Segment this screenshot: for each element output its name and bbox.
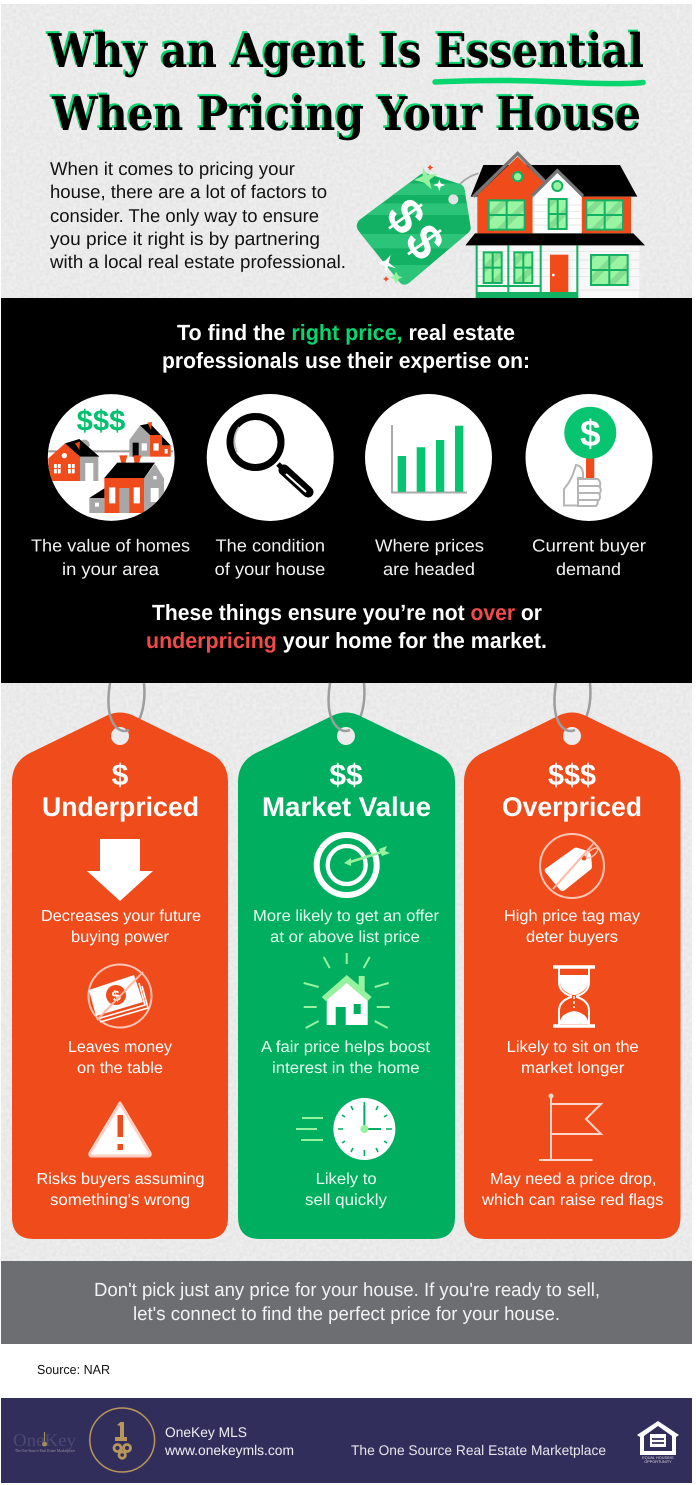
- intro text: [49, 158, 346, 272]
- section conclusion: [146, 600, 547, 653]
- tag statements: sell quickly: [305, 1192, 387, 1209]
- tag statements: interest in the home: [272, 1060, 420, 1077]
- intro text: house, there are a lot of factors to: [50, 181, 327, 202]
- icon: rising bar chart: [365, 394, 492, 521]
- icon: equal housing opportunity: [637, 1421, 679, 1464]
- icon: thumbs up with dollar sign: $: [580, 413, 601, 454]
- factor labels: are headed: [383, 559, 475, 579]
- panel: black expertise section: [1, 298, 692, 683]
- factor labels: The value of homes: [31, 536, 190, 556]
- panel: tags background: [1, 683, 692, 1261]
- tag statements: Likely to: [316, 1171, 377, 1188]
- factor labels: [31, 536, 646, 579]
- tag statements: [36, 908, 204, 1209]
- factor labels: of your house: [215, 559, 325, 579]
- icon: house with light rays: [304, 953, 390, 1028]
- tag statements: market longer: [521, 1060, 625, 1077]
- factor labels: The condition: [216, 536, 325, 556]
- icon: value of homes: [47, 394, 175, 521]
- tag statements: Decreases your future: [41, 908, 201, 925]
- section heading: [162, 320, 530, 373]
- icon: equal housing opportunity: OPPORTUNITY: [644, 1460, 672, 1464]
- icon: green price tag: [350, 165, 483, 287]
- icon: green price tag: $: [394, 214, 456, 269]
- tag statements: High price tag may: [504, 908, 640, 925]
- tag heading: [262, 759, 431, 822]
- tag statements: Likely to sit on the: [507, 1039, 639, 1056]
- icon: clock with speed lines: [296, 1098, 395, 1160]
- tag heading: [42, 759, 199, 822]
- contact text: www.onekeymls.com: [164, 1442, 294, 1458]
- panel: call to action: Don't pick just any price for your house. If you're ready to sell,: [94, 1280, 600, 1301]
- icon: red flag: [539, 1094, 601, 1160]
- source note: Source: NAR: [37, 1362, 110, 1377]
- panel: market value tag: [238, 683, 455, 1239]
- icon: price tag crossed out: [540, 834, 604, 898]
- panel: overpriced tag: [464, 683, 680, 1239]
- tag statements: [481, 908, 664, 1209]
- tag statements: on the table: [77, 1060, 163, 1077]
- tag statements: Leaves money: [68, 1039, 172, 1056]
- faint logo: The One Source Real Estate Marketplace: [15, 1448, 75, 1453]
- section conclusion: underpricing your home for the market.: [146, 628, 547, 653]
- contact text: [164, 1424, 294, 1458]
- intro text: When it comes to pricing your: [50, 158, 295, 179]
- intro text: consider. The only way to ensure: [50, 205, 319, 226]
- section heading: To find the right price, real estate: [177, 320, 515, 345]
- icon: equal housing opportunity: EQUAL HOUSING: [642, 1456, 674, 1460]
- icon: hourglass: [553, 967, 595, 1026]
- panel: call to action: let's connect to find the perfect price for your house.: [133, 1304, 560, 1325]
- icon: magnifying glass: [207, 394, 334, 521]
- tag heading: Underpriced: [42, 792, 199, 822]
- tag statements: buying power: [71, 929, 170, 946]
- contact text: OneKey MLS: [165, 1424, 247, 1440]
- tag heading: Market Value: [262, 792, 431, 822]
- factor labels: in your area: [62, 559, 159, 579]
- section heading: professionals use their expertise on:: [162, 348, 530, 373]
- tag heading: $$: [329, 759, 363, 792]
- tag statements: Risks buyers assuming: [36, 1171, 204, 1188]
- tagline: The One Source Real Estate Marketplace: [351, 1442, 606, 1458]
- icon: thumbs up with dollar sign: [526, 394, 652, 521]
- tag statements: A fair price helps boost: [261, 1039, 431, 1056]
- faint logo: OneKey: [13, 1430, 76, 1450]
- panel: footer: [1, 1398, 692, 1483]
- tag statements: at or above list price: [270, 929, 420, 946]
- icon: target with arrow: [317, 835, 390, 895]
- tag statements: something's wrong: [50, 1192, 190, 1209]
- icon: warning triangle: [90, 1103, 150, 1156]
- factor labels: demand: [556, 559, 621, 579]
- tag heading: Overpriced: [502, 792, 642, 822]
- title: [47, 23, 644, 141]
- tag statements: More likely to get an offer: [253, 908, 440, 925]
- panel: header background: [1, 4, 692, 298]
- tag statements: May need a price drop,: [490, 1171, 656, 1188]
- panel: call to action: [1, 1261, 692, 1344]
- section conclusion: These things ensure you’re not over or: [152, 600, 542, 625]
- tag heading: [502, 759, 642, 822]
- tag heading: $: [112, 759, 129, 792]
- factor labels: Where prices: [375, 536, 484, 556]
- intro text: you price it right is by partnering: [50, 228, 320, 249]
- tag statements: deter buyers: [526, 929, 618, 946]
- tag statements: which can raise red flags: [481, 1192, 664, 1209]
- panel: underpriced tag: [12, 683, 228, 1239]
- icon: gold key logo: [90, 1408, 155, 1472]
- icon: money crossed out: [88, 964, 152, 1028]
- icon: house: [465, 153, 645, 299]
- title underline: [435, 80, 643, 84]
- icon: green price tag: $: [375, 188, 437, 244]
- factor labels: Current buyer: [532, 536, 646, 556]
- icon: down arrow: [87, 839, 153, 901]
- icon: value of homes: $$$: [77, 404, 125, 437]
- icon: money crossed out: $: [110, 987, 123, 1006]
- icon: price tag and house: [350, 153, 645, 299]
- tag heading: $$$: [548, 759, 596, 792]
- intro text: with a local real estate professional.: [49, 251, 346, 272]
- tag statements: [253, 908, 440, 1209]
